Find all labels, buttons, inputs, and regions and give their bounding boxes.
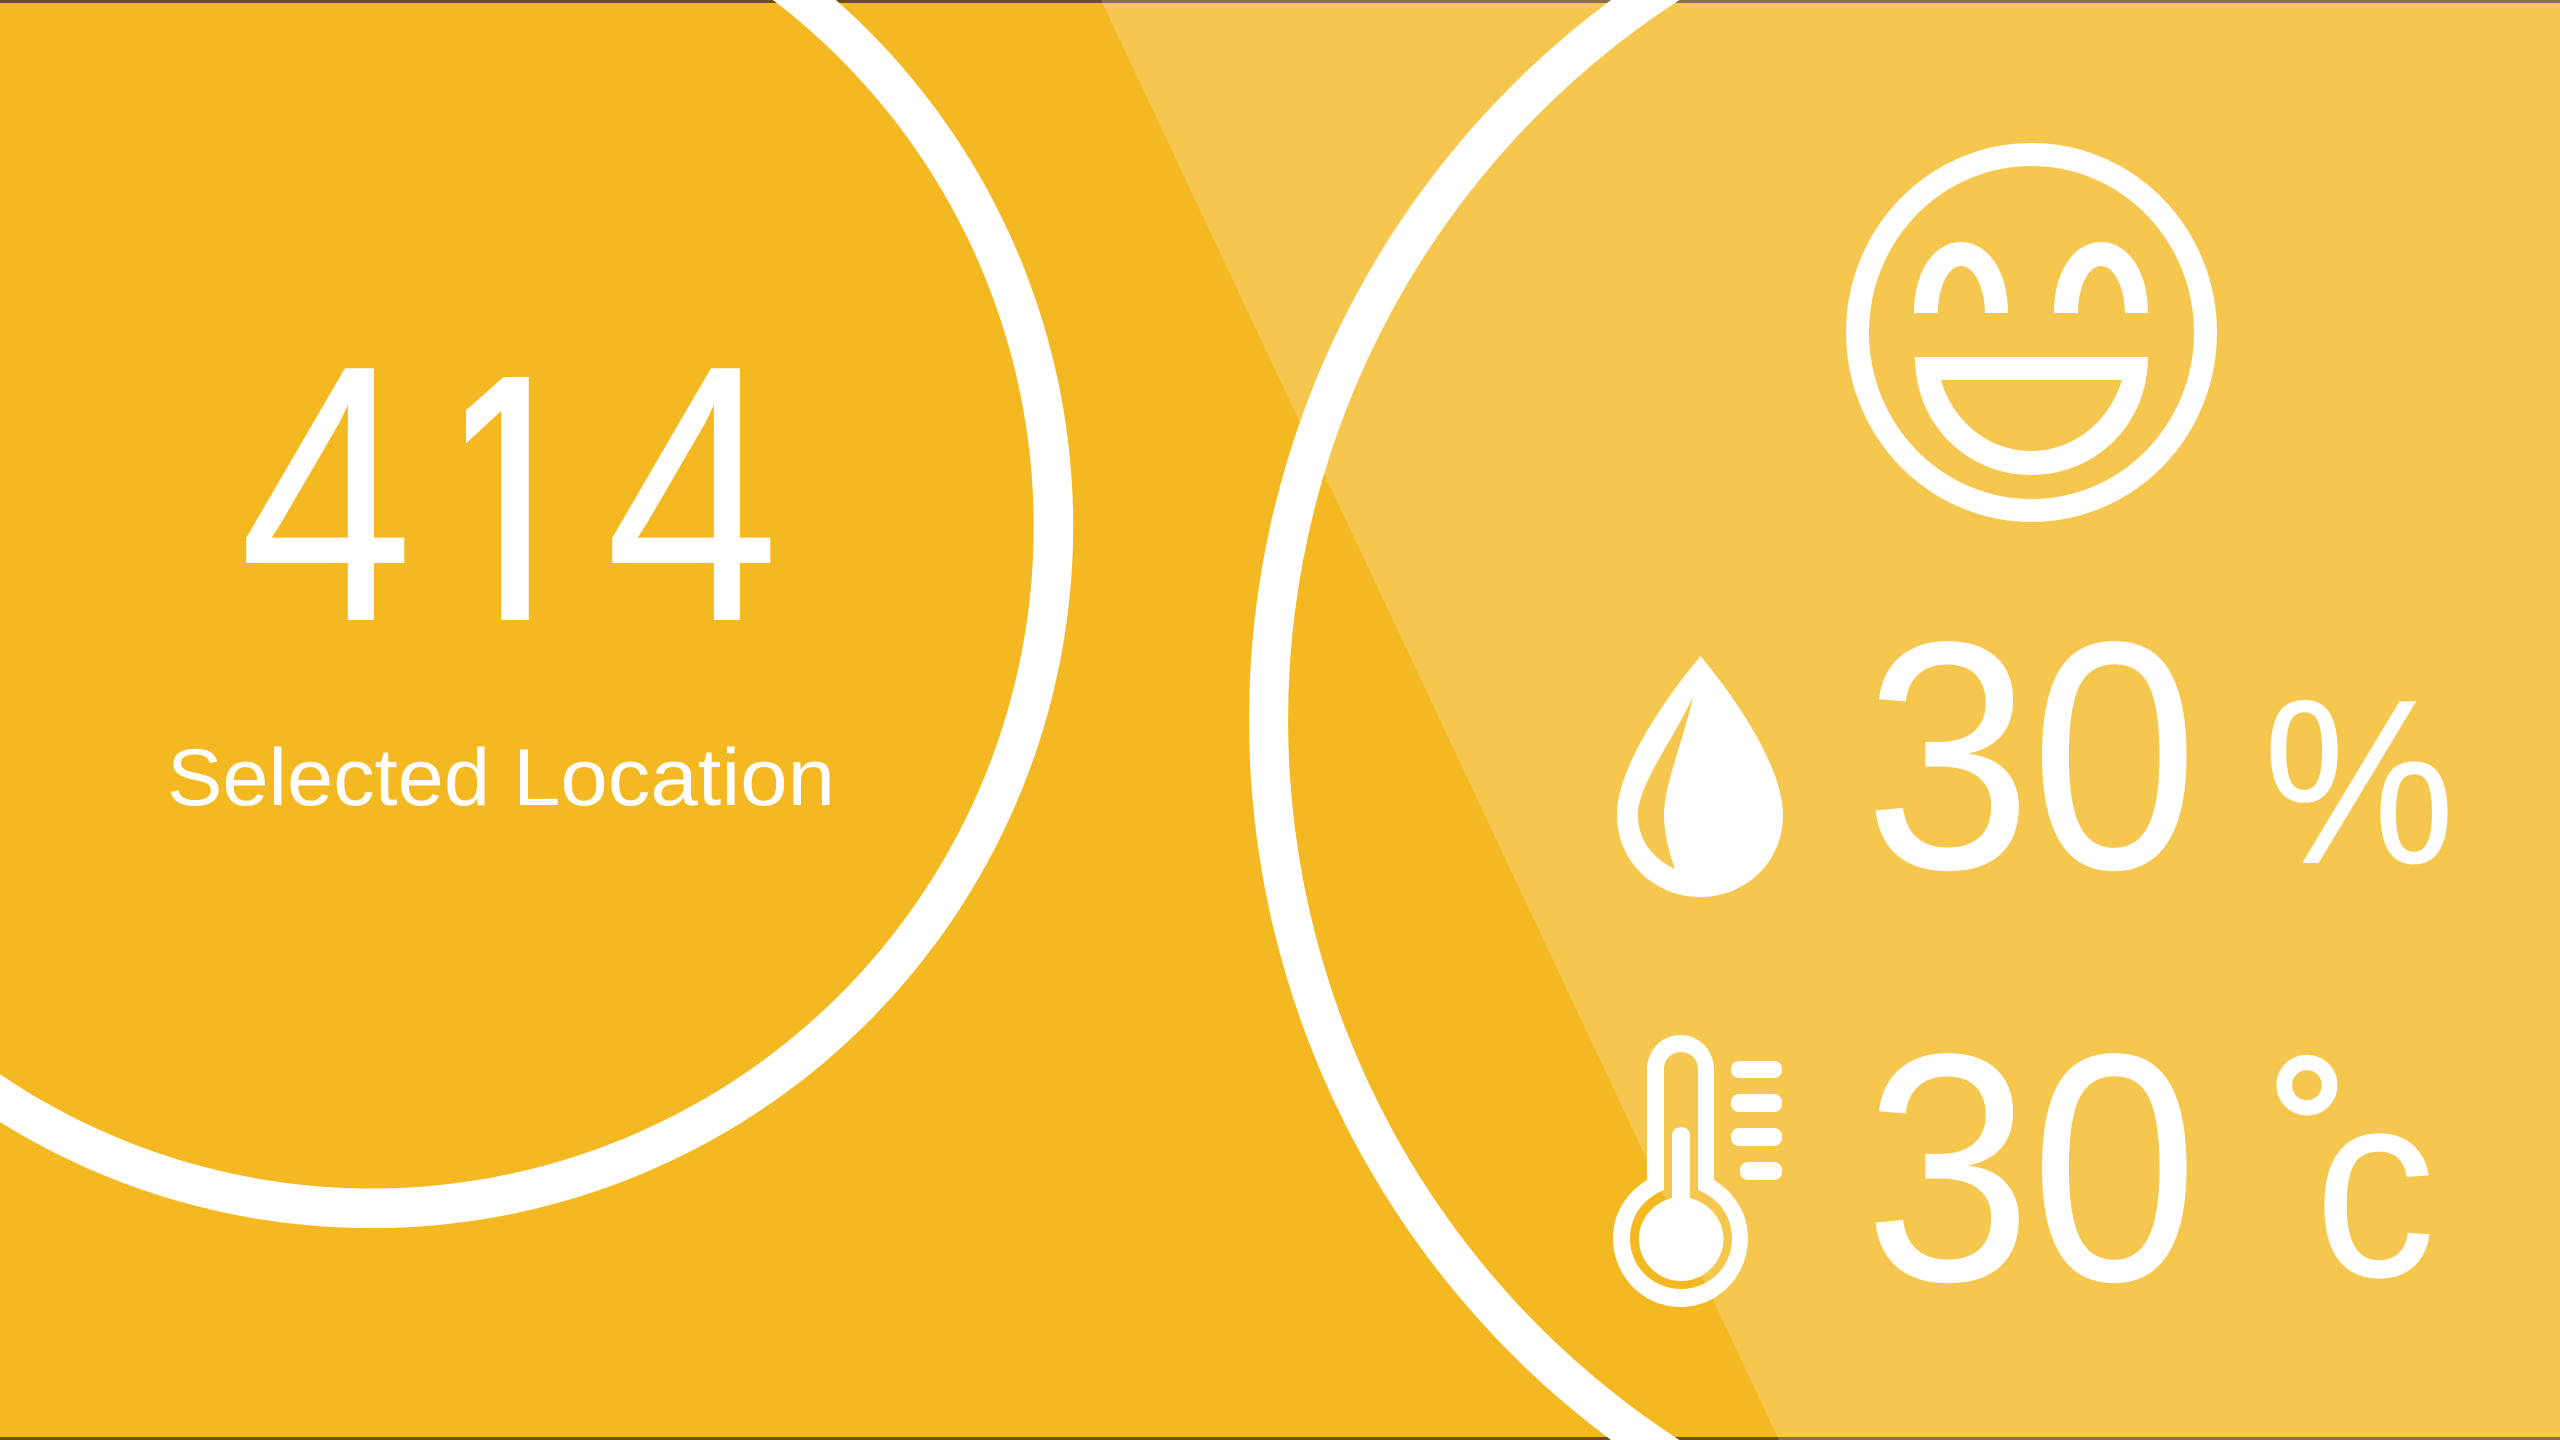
humidity unit percent: %: [2263, 651, 2455, 913]
right circle ring: [1249, 0, 1679, 1440]
label: Selected Location: Selected: [167, 733, 490, 823]
temperature value 30: 30: [1864, 986, 2196, 1349]
icon: thermometer: [1613, 1035, 1782, 1307]
top edge line: [0, 0, 2560, 3]
location number 414: 1: [423, 290, 596, 740]
location number 414: 4: [605, 289, 779, 698]
icon: smiling face: [1858, 154, 2206, 510]
temperature unit degree C: °: [2267, 1017, 2347, 1240]
temperature unit degree C: [2267, 1017, 2436, 1332]
left circle ring: [0, 0, 1073, 1228]
location number 414: [246, 368, 770, 620]
diagonal lighter panel: [1101, 0, 2560, 1440]
temperature unit degree C: c: [2314, 1036, 2436, 1332]
icon: water drop: [1617, 656, 1783, 897]
humidity value 30: 30: [1864, 574, 2196, 937]
bottom edge line: [0, 1437, 2560, 1440]
label: Selected Location: Location: [513, 733, 835, 823]
location number 414: 4: [239, 289, 413, 698]
label: Selected Location: [167, 733, 835, 823]
